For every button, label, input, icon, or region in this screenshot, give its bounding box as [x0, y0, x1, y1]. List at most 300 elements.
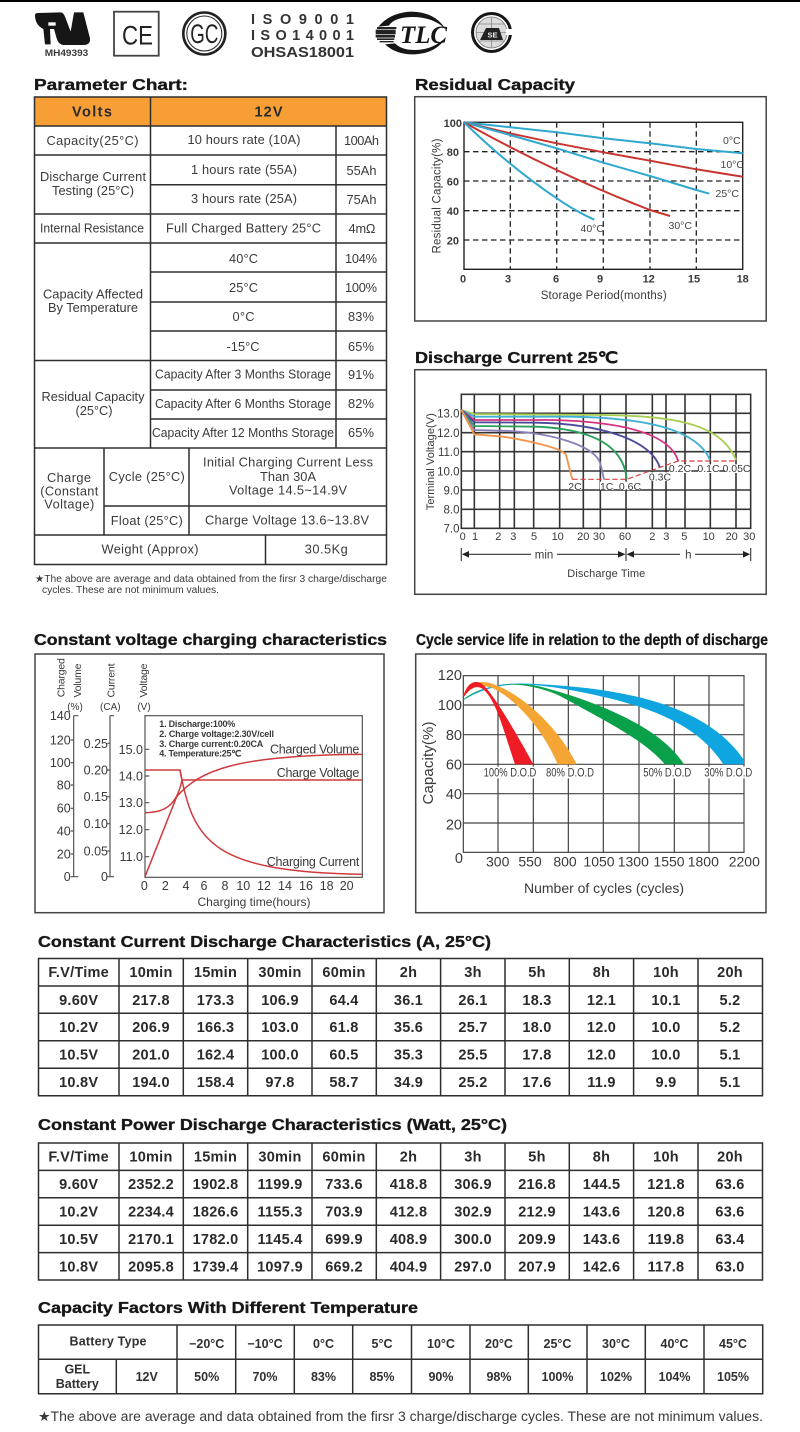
row: 10.8V: 297.0 [454, 1260, 492, 1276]
table value row [56, 1362, 749, 1391]
axis numbers: charged volume [50, 709, 71, 884]
footnote: bottom: ★The above are average and data obtained from the firsr 3 charge/discharge cycles. These are not minimum values. [38, 1409, 763, 1424]
table header row [70, 1334, 747, 1351]
x axis title: Storage Period(months) [541, 290, 667, 302]
table text rows: Internal Resistance [40, 220, 144, 236]
x axis labels: 20 [577, 531, 589, 543]
row: 10.8V: 9.9 [656, 1075, 676, 1091]
row: 10.5V: 12.0 [587, 1048, 616, 1064]
row: 9.60V [59, 1177, 745, 1193]
rate labels: 0.2C [669, 463, 692, 475]
x axis labels: 16 [299, 879, 313, 893]
x axis labels: 1 [472, 531, 478, 543]
axis numbers: voltage: 11.0 [120, 850, 143, 864]
y axis labels: 80 [447, 147, 459, 159]
x axis labels: 300 [486, 854, 510, 870]
row: 9.60V: 144.5 [583, 1177, 620, 1193]
row: 10.2V: 35.6 [394, 1020, 423, 1036]
x axis labels: 3 [510, 531, 516, 543]
row: 9.60V: 106.9 [261, 993, 299, 1009]
row: 10.8V: 97.8 [265, 1075, 295, 1091]
curve labels: 30°C [668, 220, 692, 232]
table header row: F.V/Time [48, 965, 109, 981]
table header row: 5h [528, 965, 546, 981]
row: 10.8V: 117.8 [648, 1260, 684, 1276]
band: 100% depth of discharge [463, 682, 533, 764]
table text rows: Capacity After 6 Months Storage [155, 396, 331, 411]
row: 10.5V: 209.9 [518, 1232, 556, 1248]
table value row: 100% [542, 1370, 573, 1384]
rate labels: 2C [568, 481, 582, 493]
table value row: 70% [252, 1370, 278, 1384]
x axis title: Number of cycles (cycles) [524, 880, 684, 896]
axis headers: (%) [67, 702, 83, 713]
table header row: 25°C [544, 1337, 571, 1351]
x axis labels: 0 [460, 531, 466, 543]
rate labels: 0.05C [722, 463, 751, 475]
table value row: 83% [311, 1370, 336, 1384]
row: 9.60V: 64.4 [329, 993, 359, 1009]
curves: charge volume, voltage and current [145, 754, 362, 877]
row: 9.60V: 2352.2 [128, 1177, 174, 1193]
x axis labels: 1050 [583, 854, 615, 870]
text: ISO certifications: ISO14001 [251, 28, 354, 44]
table: capacity factors [38, 1325, 763, 1394]
x axis labels: 3 [663, 531, 669, 543]
row: 10.5V: 25.5 [458, 1048, 488, 1064]
table header row: 30min [258, 965, 302, 981]
axis numbers: voltage: 14.0 [119, 770, 143, 784]
table header row: 60min [322, 1150, 366, 1166]
row: 10.5V: 2170.1 [128, 1232, 174, 1248]
row: 10.8V [59, 1075, 740, 1091]
row: 10.2V: 12.0 [587, 1020, 616, 1036]
table header row: 10h [653, 1150, 679, 1166]
row: 10.8V: 2095.8 [128, 1260, 174, 1276]
y axis labels: 60 [447, 176, 459, 188]
row: 10.8V [59, 1260, 745, 1276]
y axis labels: 13.0 [437, 409, 460, 421]
table header row: 10min [129, 965, 173, 981]
row: 10.5V: 17.8 [522, 1048, 552, 1064]
x axis labels: 10 [703, 531, 715, 543]
x axis labels: 12 [257, 879, 271, 893]
grid [461, 394, 751, 528]
row: 10.8V: 63.0 [715, 1260, 745, 1276]
y axis labels: 100 [444, 118, 462, 130]
row: 10.5V: 10.0 [651, 1048, 681, 1064]
axis numbers: charged volume: 140 [50, 709, 71, 723]
band: 50% depth of discharge [463, 684, 684, 764]
y axis labels: 80 [446, 728, 462, 744]
time range arrows [461, 548, 751, 562]
row: 9.60V: 121.8 [647, 1177, 685, 1193]
row: 10.2V: 1155.3 [257, 1204, 303, 1220]
row: 10.2V: 25.7 [458, 1020, 488, 1036]
rate labels: 0.3C [649, 472, 672, 484]
rate labels: 0.6C [619, 481, 642, 493]
text: ISO certifications: OHSAS18001 [251, 45, 354, 61]
band: 80% depth of discharge [463, 682, 577, 764]
table header row: 8h [593, 965, 610, 981]
table text rows: Initial Charging Current Less [203, 454, 373, 470]
table text rows: 25°C [229, 280, 258, 295]
heading: capacity factors: Capacity Factors With Different Temperature [38, 1300, 418, 1317]
y axis labels: 120 [438, 668, 462, 684]
x axis labels [486, 854, 760, 870]
axis numbers: voltage: 15.0 [119, 743, 143, 757]
x axis labels: 2 [649, 531, 655, 543]
heading: residual capacity: Residual Capacity [415, 77, 575, 94]
row: 10.8V: 25.2 [458, 1075, 488, 1091]
row: 10.2V: 18.0 [522, 1020, 552, 1036]
x axis labels: 20 [340, 879, 354, 893]
icon: GC mark [183, 12, 225, 54]
row: 10.5V: 100.0 [261, 1048, 299, 1064]
red cut-off dashes [572, 461, 736, 479]
table header row: 2h [400, 1150, 417, 1166]
footnote: parameter table [35, 574, 387, 596]
x axis labels: 18 [320, 879, 334, 893]
row: 10.2V: 166.3 [197, 1020, 234, 1036]
depth of discharge labels: 50% D.O.D [643, 768, 691, 780]
row: 10.5V: 60.5 [329, 1048, 359, 1064]
axis numbers: current: 0.05 [84, 844, 108, 858]
x axis labels: 14 [278, 879, 292, 893]
row: 10.5V: 1782.0 [193, 1232, 238, 1248]
x axis labels: 800 [553, 854, 577, 870]
axis headers: Voltage [138, 663, 150, 698]
x axis labels: 1300 [618, 854, 649, 870]
y axis title: Residual Capacity(%) [432, 138, 444, 254]
axis numbers: current [84, 737, 108, 884]
table text rows: Voltage) [44, 496, 94, 512]
row: 9.60V: 12.1 [587, 993, 616, 1009]
table header row: 2h [400, 965, 417, 981]
row: 10.5V: 5.1 [720, 1048, 740, 1064]
y axis labels: 20 [446, 818, 462, 834]
table text rows: 4mΩ [348, 221, 376, 236]
icon: TLC mark: TLC [400, 22, 447, 49]
table header row [48, 1150, 743, 1166]
y axis labels: 12.0 [437, 428, 460, 440]
y axis labels: 9.0 [444, 486, 460, 498]
table header row: 8h [593, 1150, 610, 1166]
table text rows: 40°C [229, 251, 258, 266]
table text rows: 65% [348, 425, 374, 440]
x axis labels: 5 [681, 531, 687, 543]
table text rows: Full Charged Battery 25°C [166, 220, 321, 236]
row: 10.8V: 10.8V [59, 1075, 98, 1091]
table header row [48, 965, 743, 981]
row: 10.5V: 143.6 [583, 1232, 620, 1248]
row: 9.60V: 1902.8 [193, 1177, 238, 1193]
y axis title: Capacity(%) [420, 722, 437, 804]
table text rows: Capacity After 3 Months Storage [155, 366, 331, 382]
icon: UL recognized mark [35, 12, 90, 45]
curve labels: Charging Current [267, 855, 360, 869]
axis numbers: current: 0.20 [84, 764, 108, 778]
table header row: 20h [717, 1150, 743, 1166]
row: 9.60V: 418.8 [390, 1177, 427, 1193]
table value row: 50% [194, 1370, 219, 1384]
table text rows: Capacity(25°C) [46, 133, 138, 148]
x axis labels: 2200 [729, 854, 760, 870]
table text rows: By Temperature [48, 300, 138, 315]
row: 10.2V [59, 1020, 740, 1036]
time range arrows: min [535, 550, 553, 562]
table text rows: Voltage 14.5~14.9V [229, 482, 347, 498]
time range arrows: h [685, 550, 692, 562]
table text rows [40, 132, 379, 556]
axis numbers: voltage [119, 743, 143, 864]
depth of discharge labels: 30% D.O.D [704, 768, 752, 780]
grid [463, 676, 744, 852]
row: 10.5V: 408.9 [390, 1232, 427, 1248]
table header row: 3h [464, 965, 482, 981]
y axis labels: 8.0 [444, 504, 460, 516]
axis headers [56, 658, 151, 713]
table header row: 5h [528, 1150, 546, 1166]
row: 10.2V: 302.9 [454, 1204, 492, 1220]
row: 10.8V: 11.9 [587, 1075, 616, 1091]
axis headers: Volume [72, 663, 84, 698]
y axis title: Terminal Voltage(V) [425, 413, 437, 510]
row: 9.60V: 63.6 [715, 1177, 745, 1193]
row: 10.2V: 10.2V [59, 1204, 98, 1220]
icon: TLC mark [376, 12, 447, 54]
curve labels [580, 135, 744, 235]
y axis labels: 100 [438, 698, 462, 714]
row: 10.5V: 35.3 [394, 1048, 423, 1064]
table header row: 30°C [602, 1337, 630, 1351]
plot axes [71, 716, 362, 877]
axis headers: Charged [56, 658, 68, 697]
row: 10.5V: 162.4 [197, 1048, 234, 1064]
axis headers: Current [106, 663, 118, 698]
y axis labels: 40 [446, 787, 462, 803]
row: 10.5V [59, 1232, 745, 1248]
curve labels: 40°C [580, 223, 604, 235]
panel: residual capacity chart [415, 97, 766, 321]
table header row: F.V/Time [48, 1150, 109, 1166]
table text rows: 65% [348, 339, 374, 354]
table text rows: Capacity Affected [43, 286, 143, 302]
table text rows: 10 hours rate (10A) [188, 132, 300, 147]
charging conditions note: 1. Discharge:100% [159, 719, 235, 729]
rate labels: 1C [600, 481, 614, 493]
y axis labels: 60 [446, 758, 462, 774]
x axis labels: 6 [553, 274, 559, 286]
row: 9.60V: 26.1 [458, 993, 488, 1009]
table text rows: 82% [348, 396, 374, 411]
table header row: 10h [653, 965, 679, 981]
curve labels: 10°C [720, 159, 744, 171]
table header row: 60min [322, 965, 366, 981]
table text rows: Cycle (25°C) [109, 469, 185, 484]
x axis labels: 0 [141, 879, 148, 893]
axis headers: (CA) [100, 702, 121, 713]
table text rows: 55Ah [346, 163, 376, 178]
row: 10.8V: 142.6 [583, 1260, 620, 1276]
row: 10.8V: 34.9 [394, 1075, 423, 1091]
table header [34, 97, 386, 126]
curve labels: Charge Voltage [277, 766, 359, 780]
table header: 12V [254, 104, 283, 120]
row: 9.60V: 36.1 [394, 993, 423, 1009]
table text rows: Charge [47, 470, 91, 485]
row: 10.2V: 1826.6 [193, 1204, 238, 1220]
x axis labels: 30 [593, 531, 605, 543]
x axis labels: 550 [518, 854, 542, 870]
row: 10.2V: 212.9 [518, 1204, 556, 1220]
table text rows: 0°C [232, 309, 254, 324]
curve labels [267, 742, 360, 869]
x axis labels: 60 [619, 531, 631, 543]
y axis labels [438, 668, 463, 867]
table header row: 0°C [313, 1337, 334, 1351]
table text rows: Charge Voltage 13.6~13.8V [205, 512, 369, 528]
row: 10.2V: 143.6 [583, 1204, 620, 1220]
row: 9.60V: 216.8 [518, 1177, 556, 1193]
row: 10.2V: 63.6 [715, 1204, 745, 1220]
table value row: 104% [659, 1370, 690, 1384]
row: 10.5V: 300.0 [454, 1232, 492, 1248]
table text rows: Float (25°C) [111, 513, 183, 528]
heading: discharge current: Discharge Current 25℃ [415, 350, 618, 367]
table header row: 10min [129, 1150, 173, 1166]
axis numbers: current: 0.10 [84, 817, 108, 831]
row: 10.5V: 10.5V [59, 1232, 98, 1248]
table header row: 10°C [427, 1337, 455, 1351]
row: 10.2V [59, 1204, 745, 1220]
x axis labels: 10 [236, 879, 250, 893]
table text rows: Discharge Current [40, 169, 146, 184]
row: 10.5V: 10.5V [59, 1048, 98, 1064]
row: 10.2V: 120.8 [647, 1204, 685, 1220]
footnote: parameter table: ★The above are average and data obtained from the firsr 3 charge/discharge [35, 574, 387, 585]
depth of discharge labels: 80% D.O.D [546, 768, 594, 780]
depth of discharge labels [484, 768, 752, 780]
table header row: 30min [258, 1150, 302, 1166]
x axis title: Charging time(hours) [198, 895, 310, 909]
table text rows: 104% [345, 251, 377, 266]
axis numbers: current: 0 [101, 870, 108, 884]
table value row: Battery [56, 1377, 99, 1391]
rate labels: 0.1C [697, 463, 720, 475]
x axis labels: 4 [183, 879, 190, 893]
row: 9.60V: 173.3 [197, 993, 234, 1009]
axis numbers: charged volume: 60 [57, 802, 71, 816]
row: 9.60V: 9.60V [59, 1177, 98, 1193]
axis headers: (V) [137, 702, 151, 713]
table text rows: Than 30A [260, 469, 316, 484]
axis numbers: charged volume: 0 [64, 870, 71, 884]
text: ISO certifications: ISO9001 [251, 12, 354, 28]
row: 9.60V: 733.6 [325, 1177, 363, 1193]
table: constant current discharge [38, 958, 762, 1096]
table text rows: 100Ah [344, 133, 379, 148]
row: 10.8V: 158.4 [197, 1075, 234, 1091]
row: 10.2V: 10.2V [59, 1020, 98, 1036]
charging conditions note: 3. Charge current:0.20CA [159, 739, 264, 749]
table value row: 98% [486, 1370, 512, 1384]
x axis labels: 12 [643, 274, 655, 286]
axis numbers: charged volume: 80 [57, 778, 71, 792]
x axis labels: 1550 [653, 854, 685, 870]
curve labels: 25°C [716, 188, 739, 200]
row: 10.8V: 194.0 [132, 1075, 170, 1091]
table value row: 102% [600, 1370, 632, 1384]
table header row: 15min [194, 1150, 237, 1166]
panel: parameter table [34, 97, 386, 564]
table header: Volts [72, 104, 112, 120]
table header row: 20°C [485, 1337, 513, 1351]
curves: discharge rates [461, 410, 736, 479]
table value row: 85% [369, 1370, 395, 1384]
table header row: −20°C [189, 1337, 224, 1351]
x axis labels: 3 [505, 274, 511, 286]
x axis labels: 1800 [688, 854, 719, 870]
icon: globe quality mark: SE [487, 30, 498, 40]
table text rows: Capacity After 12 Months Storage [152, 425, 334, 440]
row: 10.8V: 404.9 [390, 1260, 427, 1276]
axis numbers: voltage: 12.0 [119, 823, 143, 837]
curve labels: Charged Volume [270, 742, 359, 756]
x axis labels: 0 [460, 274, 466, 286]
table text rows: Residual Capacity [42, 389, 145, 404]
table text rows: 1 hours rate (55A) [191, 162, 297, 177]
text: ISO certifications [251, 12, 354, 61]
heading: constant voltage charging: Constant voltage charging characteristics [34, 632, 387, 649]
table header row: 40°C [661, 1337, 688, 1351]
table text rows: Weight (Approx) [102, 542, 198, 556]
row: 9.60V: 10.1 [651, 993, 681, 1009]
x axis labels: 20 [726, 531, 738, 543]
row: 10.8V: 58.7 [329, 1075, 359, 1091]
axis numbers: charged volume: 120 [50, 734, 71, 748]
table text rows: (Constant [40, 484, 99, 498]
row: 10.8V: 207.9 [518, 1260, 556, 1276]
x axis labels: 15 [688, 274, 700, 286]
table header row: 5°C [372, 1337, 392, 1351]
row: 10.5V: 699.9 [325, 1232, 363, 1248]
row: 10.2V: 703.9 [325, 1204, 363, 1220]
y axis labels: 20 [447, 236, 459, 248]
row: 10.2V: 10.0 [651, 1020, 681, 1036]
table text rows: 75Ah [346, 192, 376, 207]
panel: cycle life chart [416, 654, 766, 913]
row: 9.60V: 9.60V [59, 993, 98, 1009]
y axis labels: 0 [455, 851, 463, 867]
row: 10.5V: 63.4 [715, 1232, 745, 1248]
row: 10.2V: 206.9 [132, 1020, 170, 1036]
x axis labels: 8 [222, 879, 229, 893]
table text rows: (25°C) [76, 403, 112, 418]
table header row: 20h [717, 965, 743, 981]
row: 10.8V: 669.2 [325, 1260, 363, 1276]
y axis labels: 11.0 [438, 447, 460, 459]
row: 10.2V: 5.2 [720, 1020, 740, 1036]
text: UL file number: MH49393 [45, 48, 88, 59]
table header row: −10°C [247, 1337, 283, 1351]
band: 30% depth of discharge [463, 683, 744, 764]
row: 10.5V [59, 1048, 740, 1064]
table header row: Battery Type [70, 1334, 147, 1348]
x axis labels: 18 [737, 274, 749, 286]
row: 10.8V: 1739.4 [193, 1260, 238, 1276]
dashed grid [464, 122, 743, 269]
